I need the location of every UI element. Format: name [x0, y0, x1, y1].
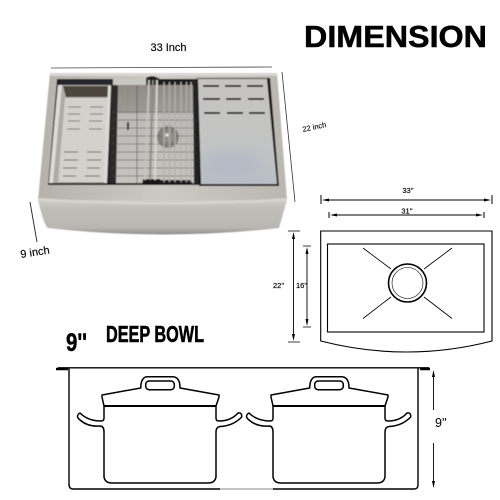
basin outline [328, 244, 484, 332]
title: DIMENSION: DIMENSION [304, 19, 487, 54]
sink outline [321, 231, 492, 352]
drain [157, 126, 179, 148]
drain circle [388, 264, 426, 302]
depth dimension 9: 9'' [435, 416, 447, 430]
basin opening [48, 79, 200, 185]
outer height dimension 22 [273, 231, 300, 342]
basin interior [113, 85, 196, 183]
roll-up drying rack [127, 76, 192, 185]
sink deck [38, 73, 287, 200]
drain slope lines [363, 248, 452, 318]
outer width dimension 33 [321, 186, 492, 204]
cross-section drawing of deep bowl [56, 368, 447, 489]
top view technical drawing [273, 186, 492, 352]
heading: 9 inch bowl depth: 9'' [66, 329, 87, 357]
cutting board [197, 78, 279, 186]
depth dimension 9 [432, 370, 447, 488]
inner height dimension 16: 16'' [296, 281, 308, 290]
pot right [246, 377, 411, 483]
sink apron front [38, 200, 287, 234]
product photo: farmhouse sink [38, 73, 287, 234]
inner width dimension 31: 31'' [401, 206, 413, 216]
colander slots [67, 107, 103, 129]
label: 33 Inch: 33 Inch [150, 42, 187, 54]
dimension line: sink height [30, 202, 37, 242]
label: 22 inch: 22 inch [302, 120, 327, 134]
bowl walls [56, 368, 430, 489]
dimension line: sink depth [282, 72, 295, 202]
wire grid rack [112, 85, 196, 183]
outer height dimension 22: 22'' [273, 281, 285, 290]
cutting board slots [203, 86, 265, 113]
outer width dimension 33: 33'' [402, 186, 414, 195]
inner width dimension 31 [329, 206, 484, 218]
colander basket [49, 80, 112, 183]
inner height dimension 16 [296, 246, 311, 327]
dimension line: sink width [51, 67, 272, 68]
heading: DEEP BOWL: DEEP BOWL [106, 321, 204, 347]
label: 9 inch: 9 inch [20, 245, 50, 261]
pot left [78, 377, 242, 483]
